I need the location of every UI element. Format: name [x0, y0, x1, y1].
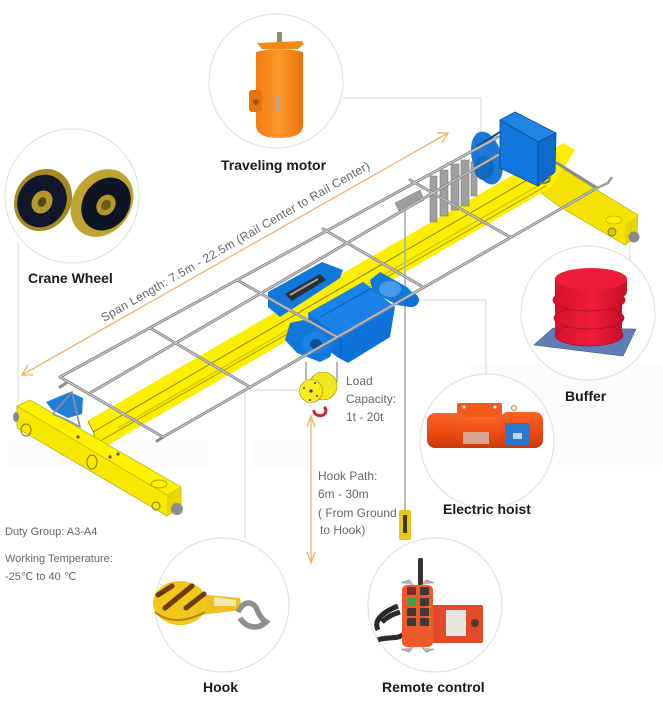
text: duty group and temperature: -25℃ to 40 ℃: [5, 571, 76, 583]
crane illustration: [13, 112, 640, 540]
label: Traveling motor: [221, 157, 327, 173]
hanging pendant cable: [404, 210, 406, 510]
leader lines: [18, 98, 630, 538]
text: hook path: 6m - 30m: [318, 487, 369, 501]
icon: wheels: [3, 157, 146, 249]
panel: electric hoist: [420, 374, 554, 517]
trolley rear frame: [268, 262, 343, 317]
text: load capacity: Load: [346, 374, 373, 388]
label: Hook: [203, 679, 238, 695]
dimension arrow: span length: [22, 133, 448, 375]
panel: remote control: [368, 538, 502, 695]
control box: [500, 112, 556, 186]
right end carriage: [540, 165, 640, 245]
pendant controller: [399, 510, 411, 540]
panel: traveling motor: [209, 14, 343, 173]
main girder: [87, 143, 575, 452]
icon: motor: [249, 32, 304, 138]
festoon cables: [395, 160, 477, 222]
hoist unit: [285, 272, 419, 363]
icon: buffer: [534, 268, 636, 356]
label: Crane Wheel: [28, 270, 113, 286]
label: Electric hoist: [443, 501, 531, 517]
icon: hook: [153, 581, 266, 627]
text: duty group and temperature: Working Temperature:: [5, 553, 113, 565]
text: duty group and temperature: Duty Group: A3-A4: [5, 526, 97, 538]
left travel drive: [46, 392, 83, 427]
label: Remote control: [382, 679, 485, 695]
text: load capacity: Capacity:: [346, 392, 396, 406]
panel: buffer: [521, 246, 655, 404]
text: hook path: Hook Path:: [318, 469, 377, 483]
hook block: [300, 362, 337, 416]
panel: hook: [153, 538, 289, 695]
text: hook path: to Hook): [320, 523, 365, 537]
icon: hoist: [427, 403, 543, 448]
walkway rails and cross bars: [60, 137, 597, 441]
travel motor: [466, 128, 508, 188]
panel: crane wheel: [3, 129, 146, 286]
text: load capacity: 1t - 20t: [346, 410, 384, 424]
text: hook path: ( From Ground: [318, 506, 397, 520]
label: Buffer: [565, 388, 607, 404]
left end carriage: [13, 400, 183, 516]
text: span length: Span Length: 7.5m - 22.5m (Rail Center to Rail Center): [98, 158, 372, 325]
dimension arrow: hook path: [307, 416, 315, 563]
icon: remote: [377, 558, 483, 652]
